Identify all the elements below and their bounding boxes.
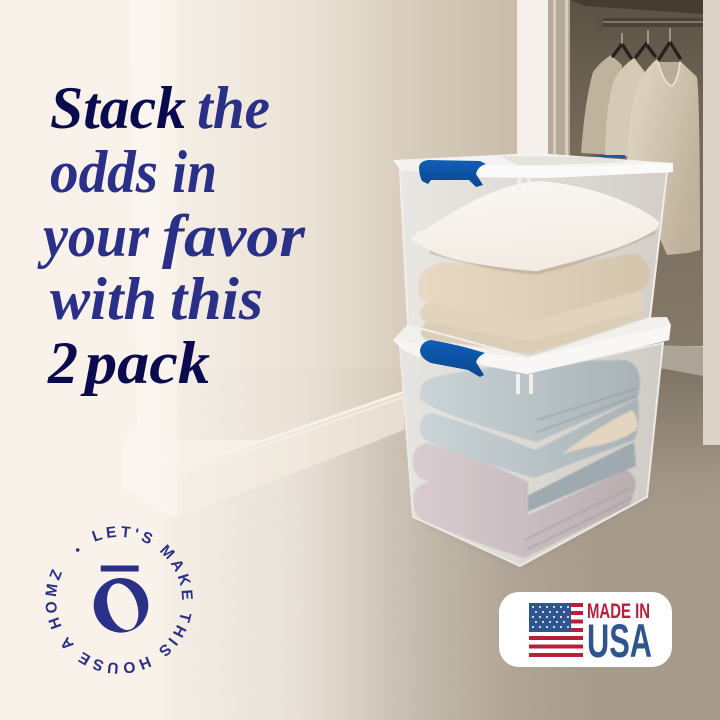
line 4: with	[50, 266, 157, 332]
pillow shadow	[430, 232, 655, 273]
box lip seams	[517, 178, 531, 192]
tan blanket stack	[418, 254, 650, 354]
line 3: your	[37, 203, 150, 269]
top storage box	[400, 170, 667, 358]
line 4	[50, 266, 263, 332]
top lid	[393, 153, 673, 178]
icon: blue handle bottom	[420, 340, 485, 377]
baseboard	[178, 392, 404, 517]
bottom lid front strip	[393, 325, 670, 394]
logo bar	[101, 566, 139, 572]
line 2	[50, 139, 217, 205]
icon: blue handle top	[419, 160, 486, 187]
blue blanket middle	[420, 398, 639, 478]
line 5: 2	[47, 330, 78, 396]
carpet floor	[0, 368, 720, 720]
line 1: Stack	[50, 75, 186, 141]
headline	[37, 75, 306, 396]
tan fold peeking	[562, 410, 637, 454]
bottom storage box	[400, 343, 663, 567]
mauve blanket lower	[413, 470, 636, 558]
icon: US flag	[529, 603, 583, 657]
door frame right	[703, 0, 720, 445]
line 2: odds	[50, 139, 158, 205]
line 1: the	[197, 75, 270, 141]
logo letter o	[94, 578, 148, 634]
logo: circular badge	[45, 526, 193, 674]
blankets stack	[413, 360, 640, 558]
line 4: this	[170, 266, 263, 332]
box back fill	[400, 343, 663, 566]
pillow	[412, 181, 659, 271]
line 3: favor	[162, 203, 306, 269]
shirts on hangers	[581, 28, 700, 255]
shirt 3	[627, 59, 700, 255]
text: USA: USA	[587, 614, 652, 667]
shirt 1	[581, 55, 622, 155]
line 3	[37, 203, 306, 269]
circular slogan: LET'S MAKE THIS HOUSE A HOMZ	[45, 526, 193, 674]
text: made in: MADE IN	[587, 600, 650, 623]
wall	[0, 0, 720, 440]
hangers	[613, 42, 680, 59]
bottom lid surface	[393, 317, 671, 374]
badge pill	[499, 592, 672, 667]
wall column at left	[122, 0, 177, 517]
badge: made in USA	[499, 592, 672, 667]
blue blanket upper	[420, 360, 640, 442]
top box body	[400, 170, 667, 358]
white fade overlay	[0, 0, 520, 720]
mauve blanket upper	[413, 443, 528, 518]
closet rod	[597, 16, 703, 31]
separator dot	[76, 548, 79, 552]
line 2: in	[172, 139, 217, 205]
blue fold middle	[524, 442, 636, 512]
shirt 2	[605, 58, 645, 157]
translucent box body	[400, 343, 663, 566]
line 1	[50, 75, 270, 141]
box shadow	[413, 470, 650, 567]
line 5: pack	[80, 330, 210, 396]
closet opening	[517, 0, 703, 376]
top lid back handle	[590, 155, 625, 158]
